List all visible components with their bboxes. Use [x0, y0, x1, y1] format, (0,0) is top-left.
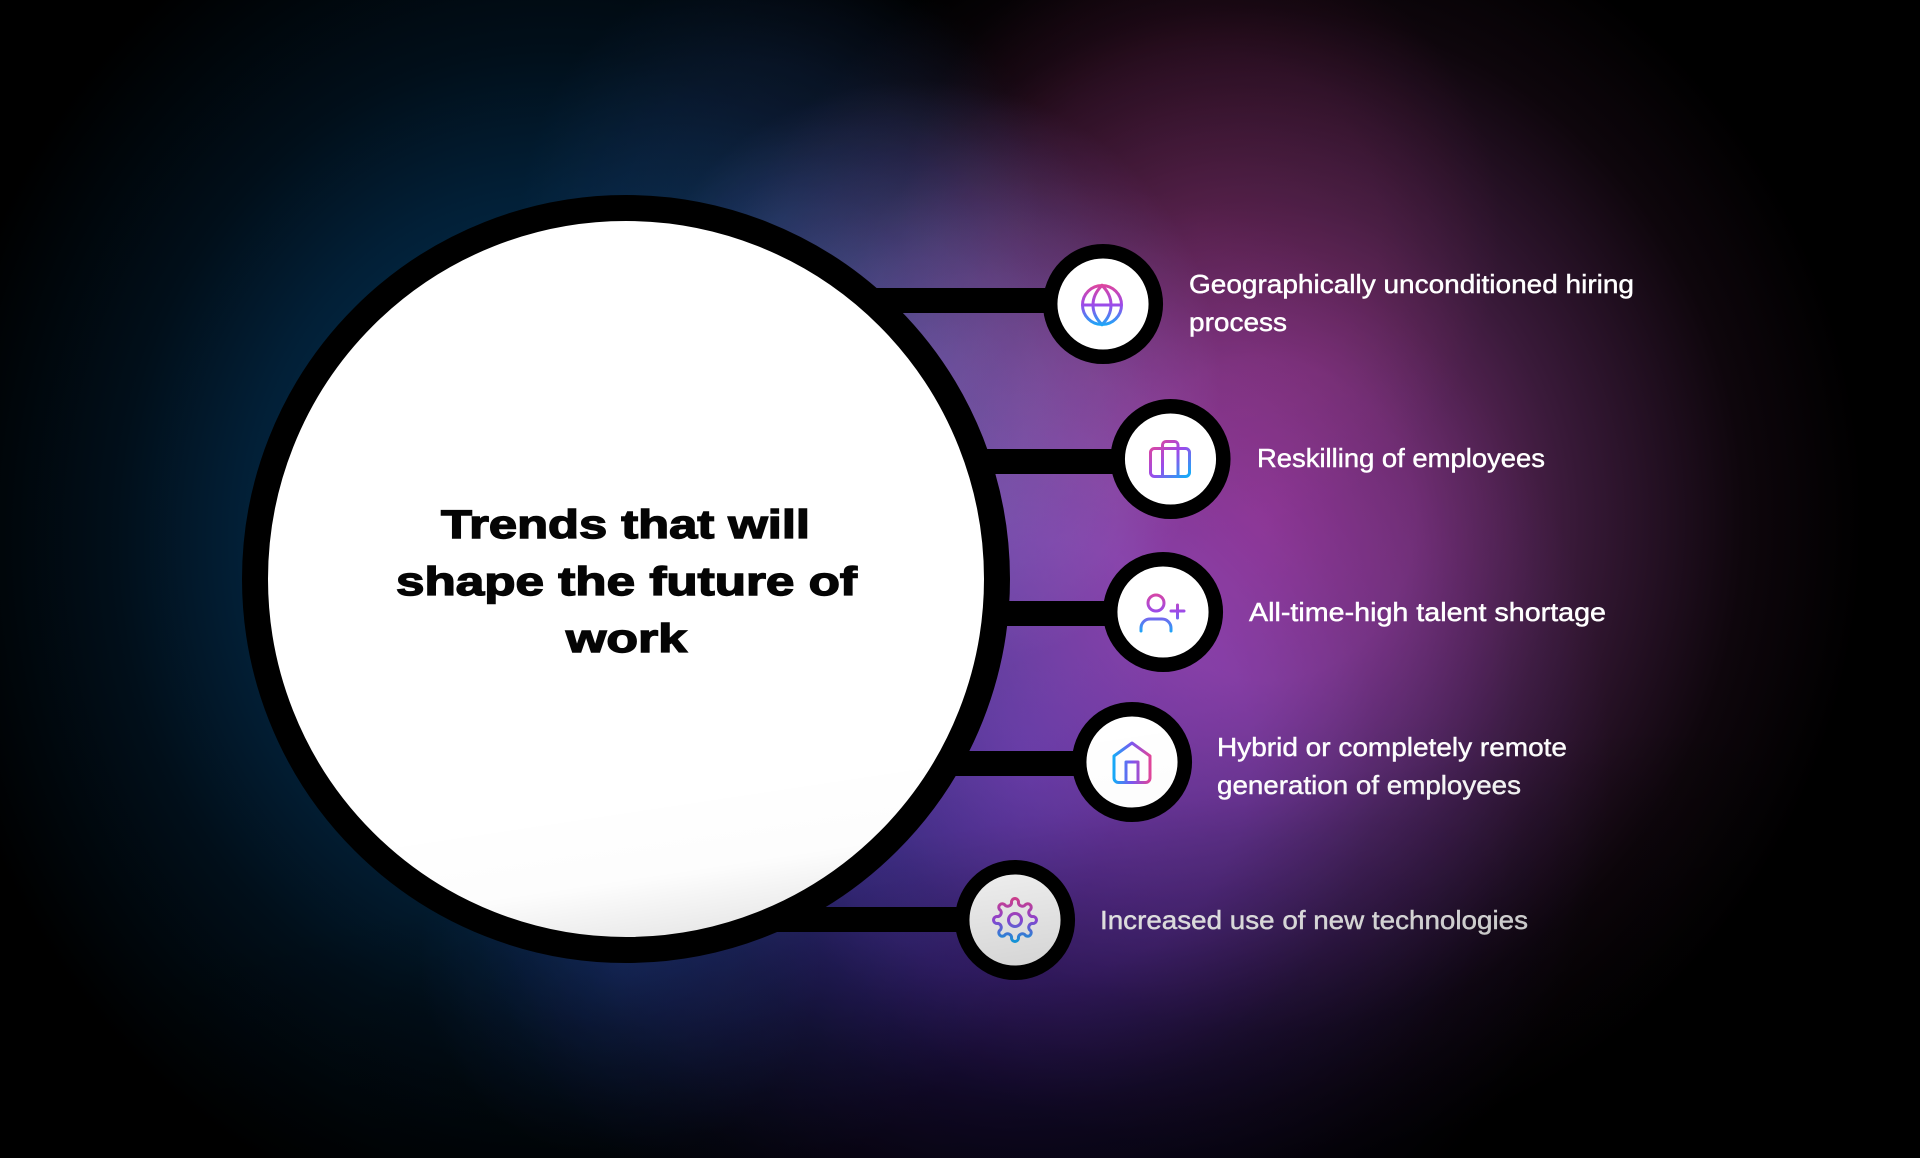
bottom shade [0, 700, 1920, 1158]
icon: house [1114, 743, 1150, 782]
label: hybrid or remote [1217, 732, 1567, 800]
icon: briefcase [1150, 442, 1190, 476]
label: reskilling: Reskilling of employees [1257, 443, 1545, 473]
central circle [255, 208, 997, 950]
icon: gear [994, 899, 1036, 941]
label: hiring process: Geographically unconditioned hiring [1189, 269, 1634, 299]
label: hiring process [1189, 269, 1634, 337]
node: house [1079, 709, 1185, 815]
connector bars [700, 288, 1170, 932]
title: Trends that will [441, 503, 810, 547]
label: hybrid or remote: Hybrid or completely remote [1217, 732, 1567, 762]
node: globe [1050, 251, 1156, 357]
label: hybrid or remote: generation of employees [1217, 770, 1521, 800]
node: gear [962, 867, 1068, 973]
node: person [1110, 559, 1216, 665]
title: shape the future of [396, 560, 858, 604]
node: briefcase [1118, 406, 1223, 512]
icon: person plus [1141, 595, 1184, 631]
title: work [565, 617, 688, 661]
label: new technologies: Increased use of new technologies [1100, 905, 1528, 935]
label: talent shortage: All-time-high talent shortage [1249, 597, 1606, 627]
title [396, 503, 858, 661]
label: hiring process: process [1189, 307, 1287, 337]
icon: globe [1082, 286, 1122, 324]
